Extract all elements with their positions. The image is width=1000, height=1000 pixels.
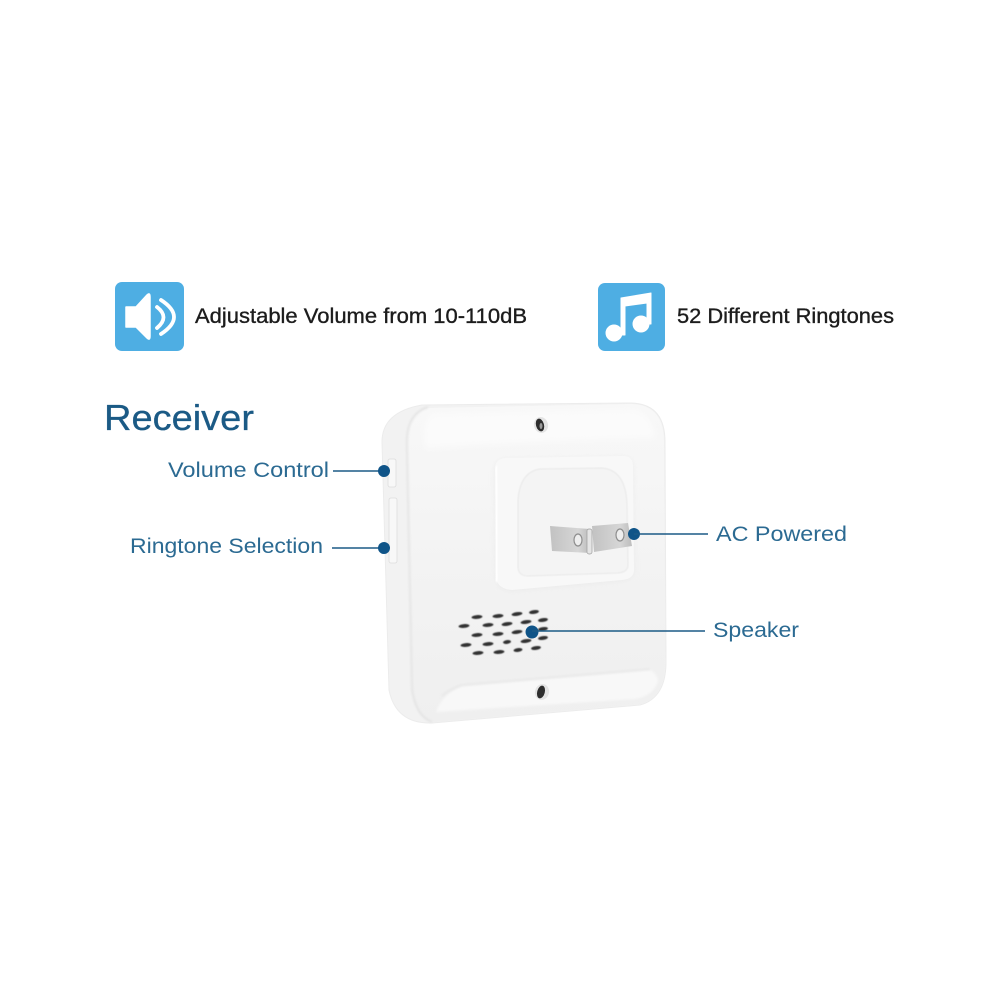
- bottom bevel: [436, 670, 658, 712]
- label: Speaker: Speaker: [713, 619, 799, 642]
- speaker grille: [458, 609, 548, 655]
- label: Volume Control: Volume Control: [168, 459, 329, 482]
- label: AC Powered: [628, 523, 847, 546]
- top bevel: [424, 410, 655, 448]
- icon: speaker volume: [115, 282, 184, 351]
- label: Speaker: [526, 619, 799, 642]
- ringtone button: [389, 498, 397, 563]
- label: Volume Control: [168, 459, 390, 482]
- device front face: [407, 404, 665, 722]
- heading: Receiver: Receiver: [104, 397, 254, 438]
- plug plate: [495, 456, 634, 591]
- screw hole top: [532, 415, 550, 435]
- icon: music note: [598, 283, 665, 351]
- label: Ringtone Selection: [130, 535, 390, 558]
- volume button: [388, 459, 396, 487]
- label: AC Powered: AC Powered: [716, 523, 847, 546]
- feature text: ringtones: 52 Different Ringtones: [677, 305, 894, 328]
- device body: [382, 403, 666, 723]
- feature text: adjustable volume: Adjustable Volume from 10-110dB: [195, 305, 527, 328]
- plug prongs: [550, 523, 632, 554]
- screw hole bottom: [533, 682, 551, 702]
- label: Ringtone Selection: Ringtone Selection: [130, 535, 323, 558]
- device: receiver back: [382, 403, 666, 723]
